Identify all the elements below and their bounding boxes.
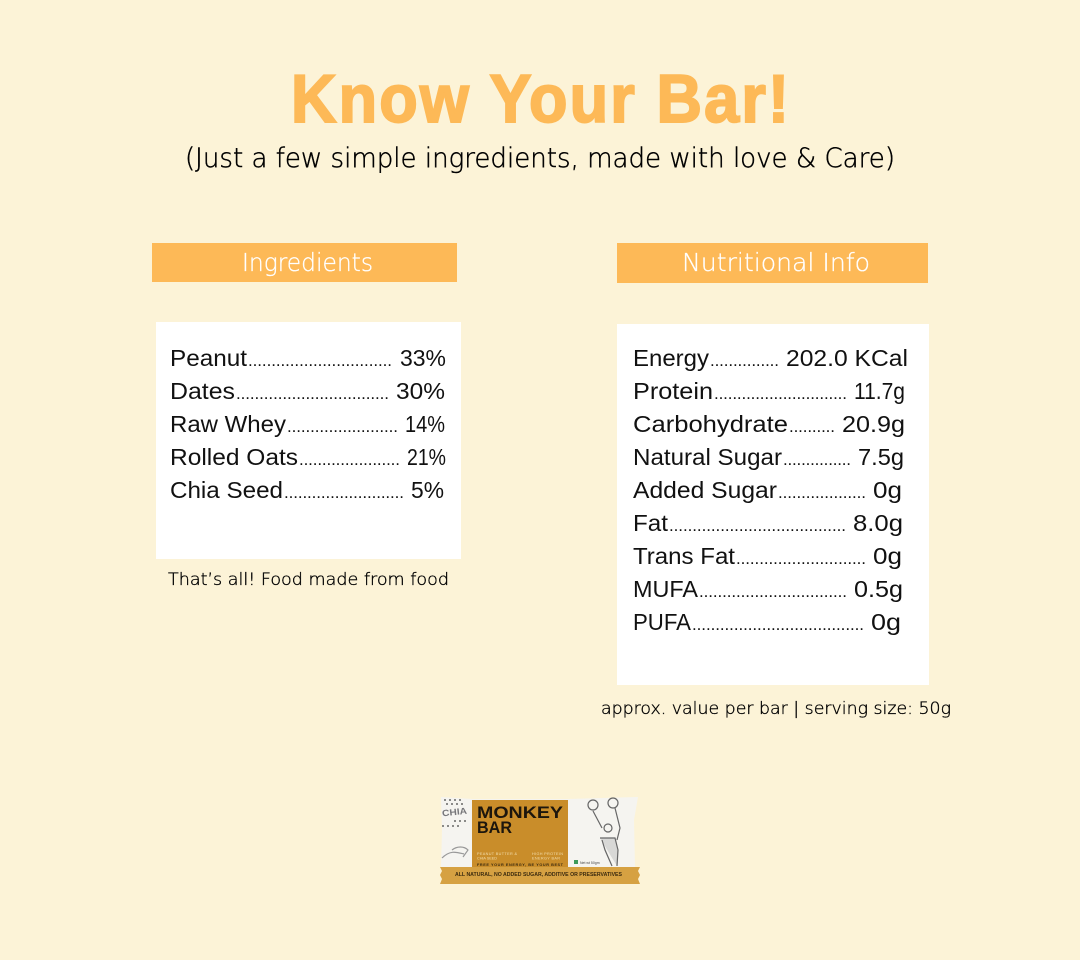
row: trans fat: 0g [873, 543, 902, 569]
product image: monkey bar wrapper: ENERGY BAR [532, 856, 560, 860]
heading: ingredients [152, 243, 457, 282]
row: fat: 8.0g [853, 510, 903, 536]
row: chia seed: .......................... [284, 483, 404, 502]
row: raw whey: Raw Whey [170, 411, 286, 437]
row: natural sugar: Natural Sugar [633, 444, 782, 470]
ingredients card [156, 322, 461, 559]
caption: serving size: approx. value per bar | serving size: 50g [601, 699, 951, 719]
row: rolled oats: Rolled Oats [170, 444, 298, 470]
row: added sugar [633, 477, 902, 503]
row: carbohydrate: Carbohydrate [633, 411, 788, 437]
row: added sugar: Added Sugar [633, 477, 777, 503]
row: peanut [170, 345, 446, 371]
panel: ingredients [152, 243, 461, 590]
row: natural sugar [633, 444, 904, 470]
product image: monkey bar wrapper: FREE YOUR ENERGY, BE YOUR BEST [477, 863, 564, 867]
wrapper body [441, 797, 638, 868]
row: natural sugar: ............... [783, 450, 851, 469]
row: chia seed: Chia Seed [170, 477, 283, 503]
row: added sugar: ................... [778, 483, 866, 502]
row: protein: 11.7g [854, 378, 905, 404]
strip text: ALL NATURAL, NO ADDED SUGAR, ADDITIVE OR PRESERVATIVES [455, 872, 623, 878]
row: pufa: 0g [871, 609, 901, 635]
row: protein [633, 378, 905, 404]
product image: monkey bar wrapper [440, 797, 640, 884]
row: peanut: Peanut [170, 345, 247, 371]
row: energy [633, 345, 908, 371]
row: trans fat: Trans Fat [633, 543, 735, 569]
product image: monkey bar wrapper: BAR [477, 819, 512, 837]
row: energy: Energy [633, 345, 709, 371]
row: pufa [633, 609, 901, 635]
row: dates [170, 378, 445, 404]
brand name: MONKEY [477, 804, 563, 822]
row: mufa: 0.5g [854, 576, 903, 602]
heading: nutritional info: Nutritional Info [682, 248, 870, 277]
row: pufa: PUFA [633, 609, 691, 635]
row: dates: Dates [170, 378, 235, 404]
row: dates: ................................. [236, 384, 389, 403]
row: added sugar: 0g [873, 477, 902, 503]
row: protein: Protein [633, 378, 713, 404]
subtitle: (Just a few simple ingredients, made with love & Care) [185, 143, 895, 174]
figure sketch [588, 798, 620, 866]
small product text: PEANUT BUTTER & [477, 852, 517, 856]
product image: monkey bar wrapper: HIGH PROTEIN [532, 852, 563, 856]
row: energy: ............... [710, 351, 779, 370]
row: fat [633, 510, 903, 536]
row: peanut: ............................... [248, 351, 392, 370]
nutrition card [617, 324, 929, 685]
row: raw whey: 14% [405, 411, 445, 437]
row: trans fat: ............................ [736, 549, 866, 568]
bottom gold strip [440, 867, 640, 884]
row: raw whey [170, 411, 445, 437]
gold label panel [472, 800, 568, 867]
row: carbohydrate: .......... [789, 417, 835, 436]
row: protein: ............................. [714, 384, 847, 403]
row: carbohydrate: 20.9g [842, 411, 905, 437]
row: fat: Fat [633, 510, 668, 536]
row: pufa: ..................................... [692, 615, 864, 634]
heading: ingredients: Ingredients [242, 248, 373, 277]
row: mufa: ................................ [699, 582, 847, 601]
heading: nutritional info [617, 243, 928, 283]
row: dates: 30% [396, 378, 445, 404]
product image: monkey bar wrapper: CHIA SEED [477, 856, 497, 860]
net weight tag: Net wt 50gm [580, 861, 600, 865]
row: mufa: MUFA [633, 576, 698, 602]
row: fat: ...................................... [669, 516, 846, 535]
peanut sketch [442, 847, 468, 858]
row: rolled oats: ...................... [299, 450, 400, 469]
row: trans fat [633, 543, 902, 569]
row: chia seed: 5% [411, 477, 444, 503]
row: energy: 202.0 KCal [786, 345, 908, 371]
panel: nutritional info [601, 243, 951, 719]
row: rolled oats: 21% [407, 444, 446, 470]
net weight tag [574, 860, 600, 865]
row: rolled oats [170, 444, 446, 470]
row: mufa [633, 576, 903, 602]
title: Know Your Bar! [291, 61, 789, 137]
row: peanut: 33% [400, 345, 446, 371]
row: natural sugar: 7.5g [858, 444, 904, 470]
chia label and seeds: CHIA [442, 806, 468, 818]
caption: ingredients: That’s all! Food made from food [168, 570, 449, 590]
row: chia seed [170, 477, 444, 503]
row: raw whey: ........................ [287, 417, 398, 436]
row: carbohydrate [633, 411, 905, 437]
